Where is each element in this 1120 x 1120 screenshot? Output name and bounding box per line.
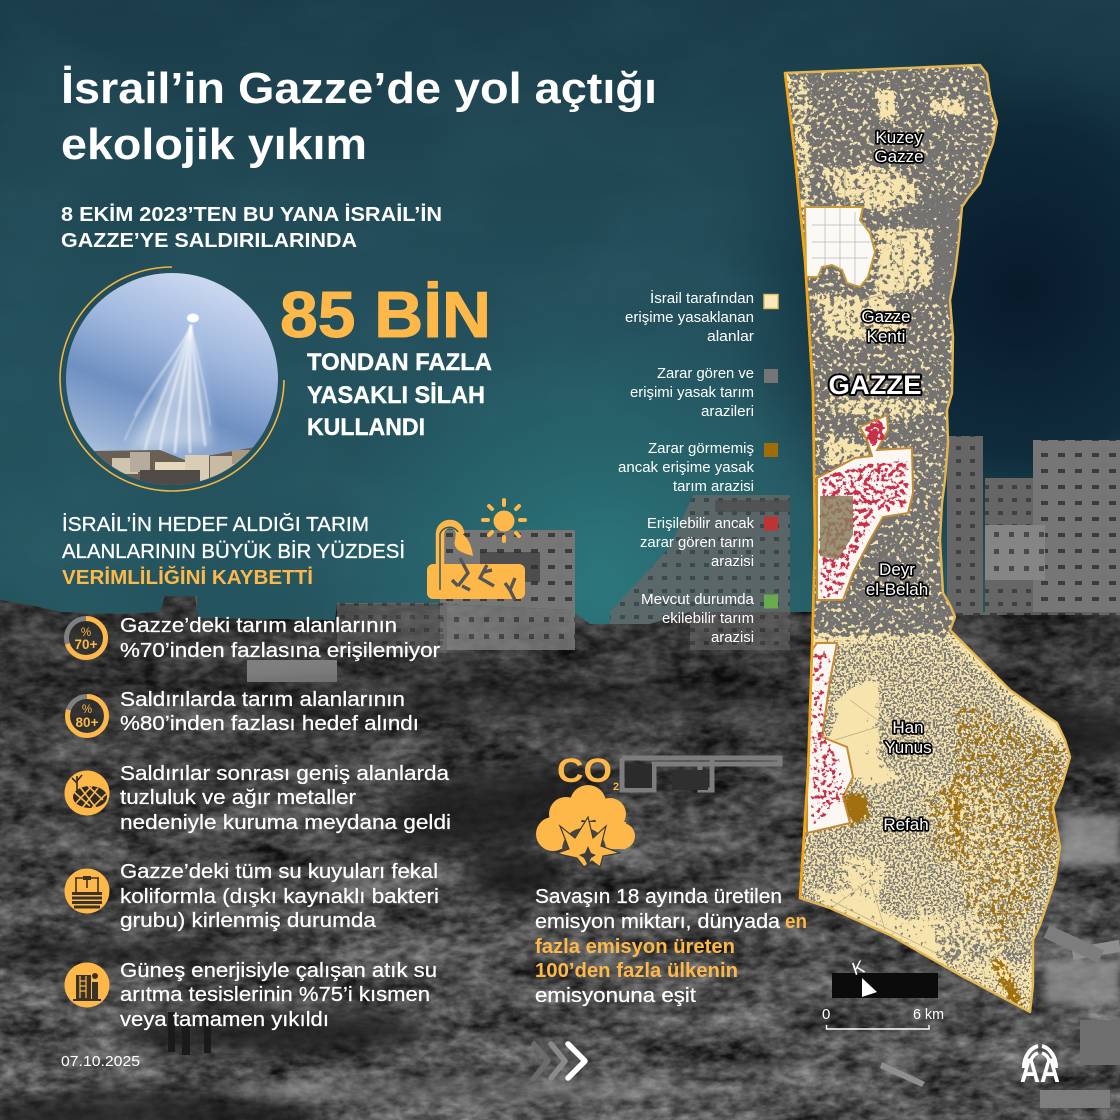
map labels: el-Belah <box>866 580 928 599</box>
map: Gaza Strip agricultural damage <box>780 60 1080 1020</box>
map labels <box>828 128 932 834</box>
map labels: GAZZE <box>828 370 922 400</box>
text: banned weapons: YASAKLI SİLAH <box>307 382 485 409</box>
map border <box>785 65 1070 1012</box>
icon: treatment plant <box>64 962 110 1008</box>
heading: agricultural land: İSRAİL’İN HEDEF ALDIĞI TARIM <box>62 513 369 536</box>
legend item: damaged, inaccessible farmland: arazileri <box>701 404 754 420</box>
legend item: restricted areas: İsrail tarafından <box>650 289 754 307</box>
legend item: currently arable farmland <box>641 592 778 646</box>
arrow: swipe chevrons <box>534 1044 585 1078</box>
map west coast line <box>785 73 815 898</box>
icon: ring 80 percent <box>68 696 106 736</box>
scale bar: 6 km <box>913 1006 944 1023</box>
title: İsrail’in Gazze’de yol açtığı <box>61 64 657 113</box>
bullet: contaminated wells: Gazze’deki tüm su kuyuları fekal <box>120 860 438 883</box>
legend item: accessible but damaged farmland: arazisi <box>711 554 754 570</box>
bullet: 80% targeted <box>68 688 419 736</box>
legend item: currently arable farmland: Mevcut durumda <box>641 592 755 608</box>
big number: 85 BİN: 85 BİN <box>280 278 491 351</box>
bullet: wastewater plants destroyed: arıtma tesislerinin %75’i kısmen <box>120 983 430 1006</box>
icon: cracked dry soil <box>64 770 110 816</box>
rooftops <box>90 447 262 490</box>
text: emissions: 100’den fazla ülkenin <box>535 960 738 982</box>
legend item: damaged, inaccessible farmland: erişimi yasak tarım <box>630 385 754 401</box>
legend item: accessible but damaged farmland: Erişilebilir ancak <box>647 516 755 532</box>
bullet: salinity and heavy metals: nedeniyle kuruma meydana geldi <box>120 811 451 834</box>
logo: Anadolu Agency: AA <box>1020 1052 1060 1090</box>
map labels: Kenti <box>867 327 905 346</box>
photo circle: white phosphorus over city <box>60 267 285 491</box>
text: banned weapons <box>307 349 492 441</box>
bullet: contaminated wells <box>64 860 439 932</box>
north arrow <box>850 957 877 997</box>
map labels: Kuzey <box>875 128 923 147</box>
map layer: damaged farmland, north (grey) <box>785 60 1000 640</box>
title: ekolojik yıkım <box>61 120 367 169</box>
legend item: undamaged but inaccessible farmland: Zarar görmemiş <box>648 441 754 457</box>
heading: agricultural land: VERİMLİLİĞİNİ KAYBETTİ <box>62 565 313 589</box>
legend item: damaged, inaccessible farmland <box>630 366 778 420</box>
text: emissions: en <box>785 911 807 933</box>
map layer: undamaged farmland (brown) <box>785 65 1065 1012</box>
icon: ring 70 percent: 70+ <box>75 637 98 652</box>
legend item: accessible but damaged farmland <box>640 516 778 570</box>
heading: agricultural land <box>62 513 405 589</box>
bullet: contaminated wells: koliformla (dışkı kaynaklı bakteri <box>120 885 439 908</box>
map layer: northern restricted zone (white) <box>805 207 875 287</box>
date: 07.10.2025 <box>61 1053 140 1070</box>
legend item: undamaged but inaccessible farmland: tarım arazisi <box>673 479 754 495</box>
icon: ring 80 percent: 80+ <box>76 715 99 730</box>
map labels: Deyr <box>879 560 915 579</box>
text: emissions: fazla emisyon üreten <box>535 936 735 958</box>
north arrow: K <box>850 957 867 979</box>
text: emissions: Savaşın 18 ayında üretilen <box>535 885 782 908</box>
map labels: Yunus <box>884 738 932 757</box>
bullet: 80% targeted: Saldırılarda tarım alanlarının <box>120 688 405 711</box>
text: banned weapons: KULLANDI <box>307 414 425 441</box>
heading: agricultural land: ALANLARININ BÜYÜK BİR YÜZDESİ <box>62 540 405 563</box>
bullet: wastewater plants destroyed <box>64 959 437 1031</box>
map layer: restricted land, lighter patches <box>786 76 1040 985</box>
text: emissions: emisyon miktarı, dünyada <box>535 910 781 933</box>
bullet: 70% inaccessible: Gazze’deki tarım alanlarının <box>120 614 397 637</box>
text: emissions: emisyonuna eşit <box>535 984 696 1007</box>
bullet: salinity and heavy metals: tuzluluk ve ağır metaller <box>120 786 356 809</box>
legend <box>618 289 778 646</box>
scale bar: 0 <box>822 1006 830 1023</box>
ruined frame building <box>622 756 780 790</box>
bullet: 80% targeted: %80’inden fazlası hedef alındı <box>120 712 419 735</box>
title <box>61 64 657 169</box>
legend item: currently arable farmland: ekilebilir tarım <box>662 611 754 627</box>
map labels: Gazze <box>874 147 924 166</box>
bullet: wastewater plants destroyed: Güneş enerjisiyle çalışan atık su <box>120 959 437 982</box>
bullet: salinity and heavy metals <box>64 762 451 834</box>
bullet: salinity and heavy metals: Saldırılar sonrası geniş alanlarda <box>120 762 450 785</box>
legend item: restricted areas: alanlar <box>707 329 754 345</box>
map layer: central restricted zone (white with red damage) <box>807 415 913 833</box>
map layer: damaged farmland, south (fine grey) <box>802 631 1068 1009</box>
bullet: 70% inaccessible: %70’inden fazlasına erişilemiyor <box>120 639 440 662</box>
icon: brick well <box>64 868 110 914</box>
legend item: restricted areas <box>625 289 778 345</box>
legend item: damaged, inaccessible farmland: Zarar gören ve <box>657 366 754 382</box>
icon: CO2 cloud with explosion: 2 <box>613 781 619 793</box>
icon: ring 70 percent: % <box>81 627 91 639</box>
icon: CO2 cloud with explosion: CO <box>557 752 612 790</box>
map labels: Han <box>892 718 924 737</box>
legend item: undamaged but inaccessible farmland <box>618 441 778 495</box>
icon: ring 80 percent: % <box>82 704 92 716</box>
legend item: accessible but damaged farmland: zarar gören tarım <box>640 535 754 551</box>
map layer: solid restricted land near Han Yunus <box>828 680 878 780</box>
bullet: wastewater plants destroyed: veya tamamen yıkıldı <box>120 1008 329 1031</box>
distant buildings <box>165 436 1120 643</box>
legend item: currently arable farmland: arazisi <box>711 630 754 646</box>
subtitle: 8 EKİM 2023’TEN BU YANA İSRAİL’İN <box>61 203 442 226</box>
bullet: contaminated wells: grubu) kirlenmiş durumda <box>120 909 377 932</box>
text: emissions <box>535 885 807 1007</box>
subtitle <box>61 203 442 252</box>
map labels: Refah <box>883 815 929 834</box>
scale bar <box>822 1006 944 1029</box>
dark road and shadow patches <box>0 680 1120 1120</box>
icon: irrigation over cracked soil with sun <box>427 500 525 600</box>
icon: CO2 cloud with explosion <box>536 752 635 867</box>
rubble pit <box>832 973 938 998</box>
bullet: 70% inaccessible <box>66 614 440 662</box>
subtitle: GAZZE’YE SALDIRILARINDA <box>61 229 357 252</box>
text: banned weapons: TONDAN FAZLA <box>307 349 492 376</box>
legend item: restricted areas: erişime yasaklanan <box>625 310 754 326</box>
icon: ring 70 percent <box>66 618 106 658</box>
legend item: undamaged but inaccessible farmland: ancak erişime yasak <box>618 460 755 476</box>
map labels: Gazze <box>861 307 911 326</box>
